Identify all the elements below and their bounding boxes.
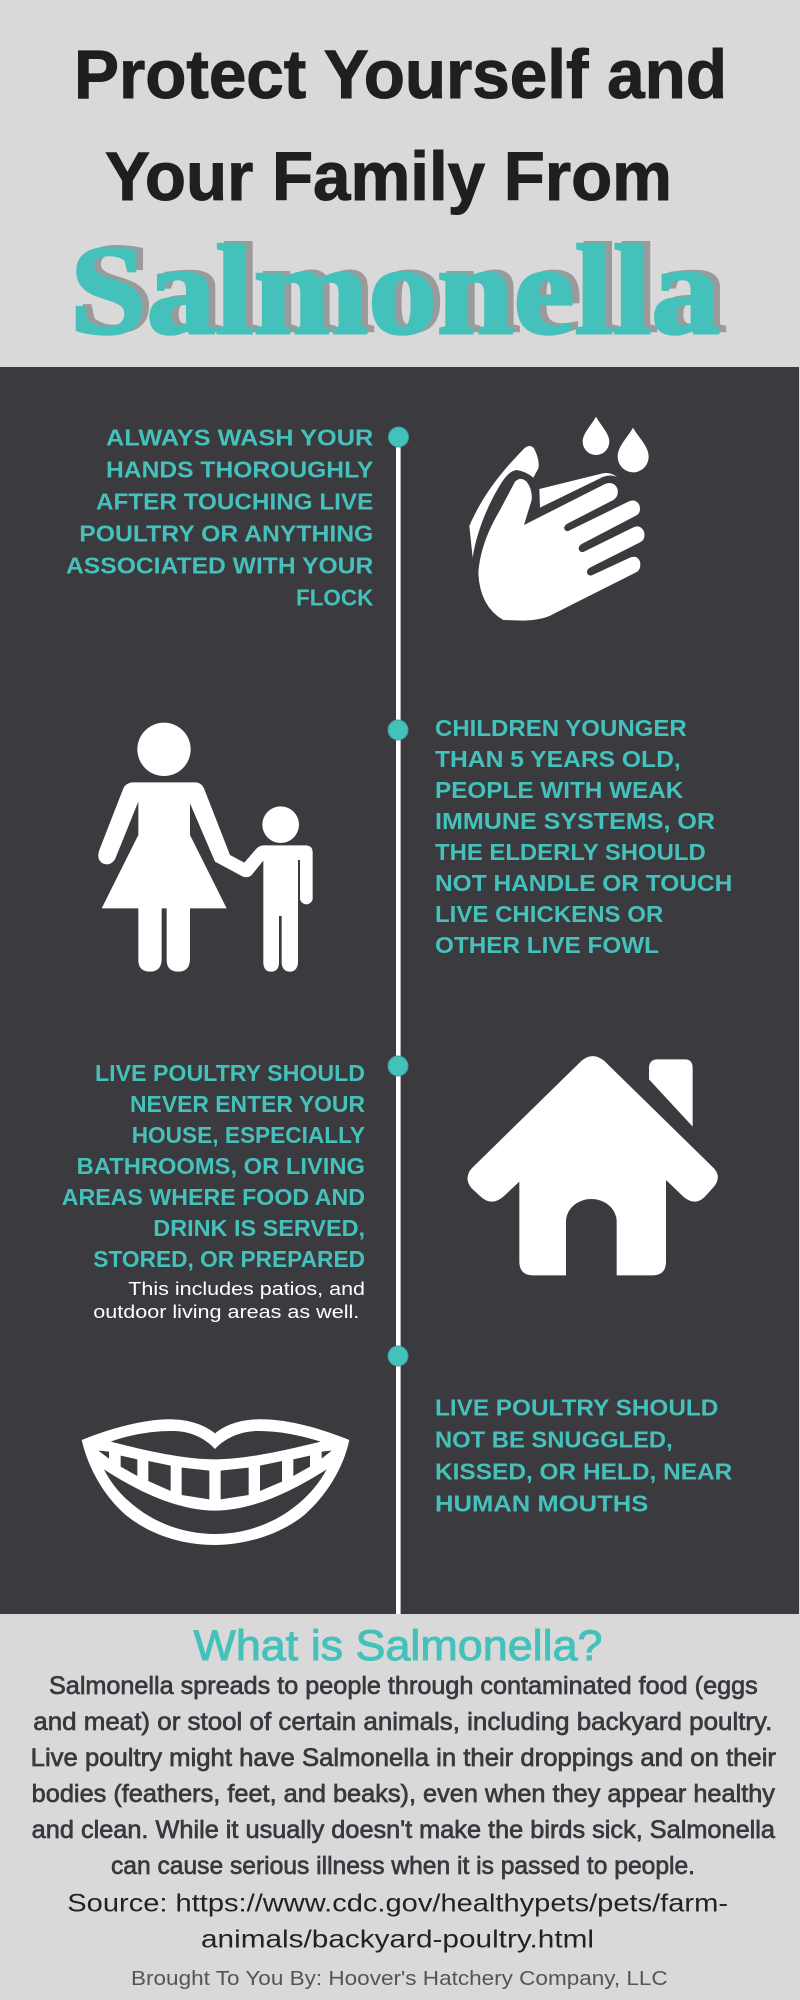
tip 1 text: wash hands: HANDS THOROUGHLY xyxy=(106,457,374,483)
tip 3 text: keep out of house: AREAS WHERE FOOD AND xyxy=(62,1184,365,1210)
body paragraph: Salmonella spreads to people through contaminated food (eggs xyxy=(49,1672,758,1700)
tip 3 text: keep out of house: HOUSE, ESPECIALLY xyxy=(132,1122,365,1148)
title: protect yourself: Protect Yourself and xyxy=(74,36,727,113)
heading: What is Salmonella? xyxy=(194,1622,602,1670)
tip 4 text: no snuggling: HUMAN MOUTHS xyxy=(435,1491,648,1517)
body paragraph: Live poultry might have Salmonella in their droppings and on their xyxy=(31,1744,776,1772)
tip 4 text: no snuggling: NOT BE SNUGGLED, xyxy=(435,1427,673,1453)
source: animals/backyard-poultry.html xyxy=(201,1926,594,1954)
icon: smiling mouth xyxy=(82,1419,349,1545)
panel: header xyxy=(0,0,800,367)
icon: mother and child xyxy=(98,723,313,972)
tip 3 note: patios: outdoor living areas as well. xyxy=(93,1302,359,1322)
panel: dark tips xyxy=(0,367,799,1614)
body paragraph: and clean. While it usually doesn't make the birds sick, Salmonella xyxy=(32,1816,775,1844)
body paragraph: can cause serious illness when it is passed to people. xyxy=(111,1852,695,1880)
tip 1 text: wash hands: ALWAYS WASH YOUR xyxy=(106,425,373,451)
tip 1 text: wash hands: POULTRY OR ANYTHING xyxy=(79,521,373,547)
tip 1 text: wash hands: AFTER TOUCHING LIVE xyxy=(96,489,373,515)
tip 1 text: wash hands xyxy=(66,425,374,611)
tip 2 text: children: LIVE CHICKENS OR xyxy=(435,901,663,927)
tip 2 text: children: IMMUNE SYSTEMS, OR xyxy=(435,808,715,834)
tip 2 text: children xyxy=(435,715,732,958)
title: Salmonella: Salmonella xyxy=(77,217,727,359)
tip 1 text: wash hands: FLOCK xyxy=(296,585,373,611)
tip 3 text: keep out of house xyxy=(62,1060,365,1272)
icon: hand washing xyxy=(469,417,649,621)
tip 2 text: children: THE ELDERLY SHOULD xyxy=(435,839,706,865)
tip 2 text: children: PEOPLE WITH WEAK xyxy=(435,777,683,803)
title: Salmonella: Salmonella xyxy=(70,219,720,361)
icon: house xyxy=(467,1056,718,1275)
tip 3 note: patios xyxy=(93,1279,365,1322)
timeline xyxy=(388,427,408,1614)
tip 3 text: keep out of house: DRINK IS SERVED, xyxy=(153,1215,365,1241)
source: Source: https://www.cdc.gov/healthypets/pets/farm- xyxy=(67,1890,728,1918)
panel: what is salmonella xyxy=(0,1614,800,2000)
tip 2 text: children: CHILDREN YOUNGER xyxy=(435,715,687,741)
tip 3 text: keep out of house: NEVER ENTER YOUR xyxy=(130,1091,365,1117)
tip 1 text: wash hands: ASSOCIATED WITH YOUR xyxy=(66,553,373,579)
tip 2 text: children: OTHER LIVE FOWL xyxy=(435,932,659,958)
tip 4 text: no snuggling: LIVE POULTRY SHOULD xyxy=(435,1395,718,1421)
credit line: Brought To You By: Hoover's Hatchery Company, LLC xyxy=(131,1968,668,1990)
body paragraph: bodies (feathers, feet, and beaks), even when they appear healthy xyxy=(32,1780,775,1808)
title: protect yourself: Your Family From xyxy=(105,138,672,215)
tip 3 text: keep out of house: STORED, OR PREPARED xyxy=(93,1246,365,1272)
tip 3 text: keep out of house: LIVE POULTRY SHOULD xyxy=(95,1060,365,1086)
tip 3 text: keep out of house: BATHROOMS, OR LIVING xyxy=(77,1153,365,1179)
body paragraph: and meat) or stool of certain animals, including backyard poultry. xyxy=(33,1708,772,1736)
tip 3 note: patios: This includes patios, and xyxy=(128,1279,365,1299)
source xyxy=(67,1890,728,1954)
tip 2 text: children: NOT HANDLE OR TOUCH xyxy=(435,870,732,896)
tip 4 text: no snuggling: KISSED, OR HELD, NEAR xyxy=(435,1459,732,1485)
title: protect yourself xyxy=(74,36,727,215)
tip 2 text: children: THAN 5 YEARS OLD, xyxy=(435,746,681,772)
tip 4 text: no snuggling xyxy=(435,1395,732,1517)
body paragraph xyxy=(31,1672,776,1880)
